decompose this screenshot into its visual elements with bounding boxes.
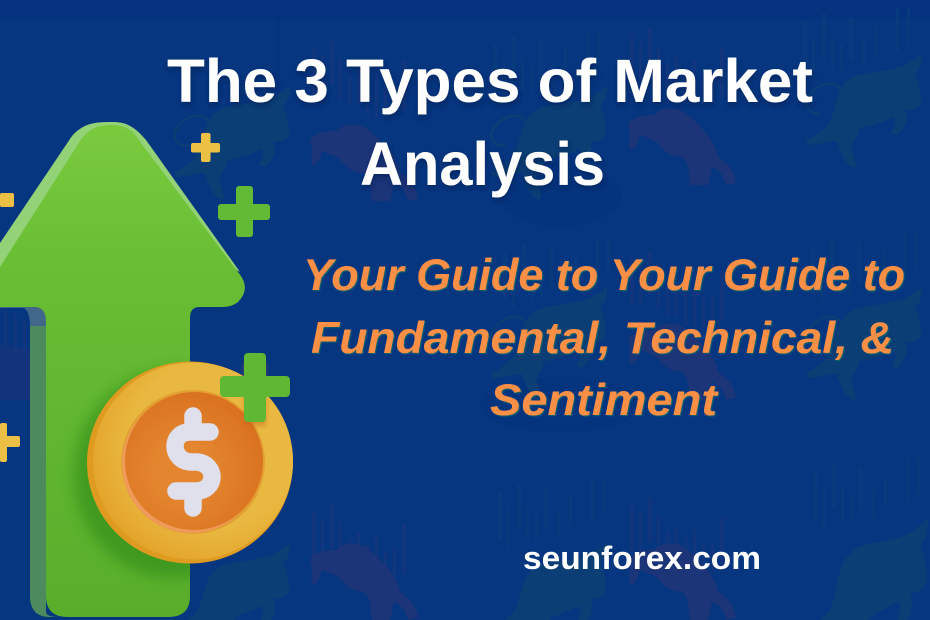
title: The 3 Types of Market: [167, 47, 813, 116]
coin shadow on arrow: [70, 368, 190, 582]
icon: gold coin with dollar: [87, 362, 293, 564]
icon: green up arrow: [0, 122, 245, 617]
coin face: [121, 390, 265, 534]
coin rim: [87, 362, 293, 564]
subtitle: [303, 251, 905, 425]
icon: green plus on coin: [220, 353, 290, 426]
title: Analysis: [360, 130, 605, 199]
dollar sign: [175, 416, 212, 508]
subtitle: Fundamental, Technical, &: [311, 314, 894, 363]
arrow back side: [30, 309, 60, 617]
arrow highlight edge: [0, 122, 240, 280]
icon: yellow plus left edge upper: [0, 193, 14, 207]
icon: yellow plus left edge lower: [0, 423, 20, 462]
subtitle: Sentiment: [490, 376, 719, 425]
subtitle: Your Guide to Your Guide to: [303, 251, 905, 300]
icon: yellow plus top: [191, 133, 220, 162]
arrow front face: [0, 125, 245, 617]
website label: seunforex.com: [523, 540, 761, 576]
title: [167, 47, 813, 199]
icon: green plus upper right: [218, 186, 270, 237]
